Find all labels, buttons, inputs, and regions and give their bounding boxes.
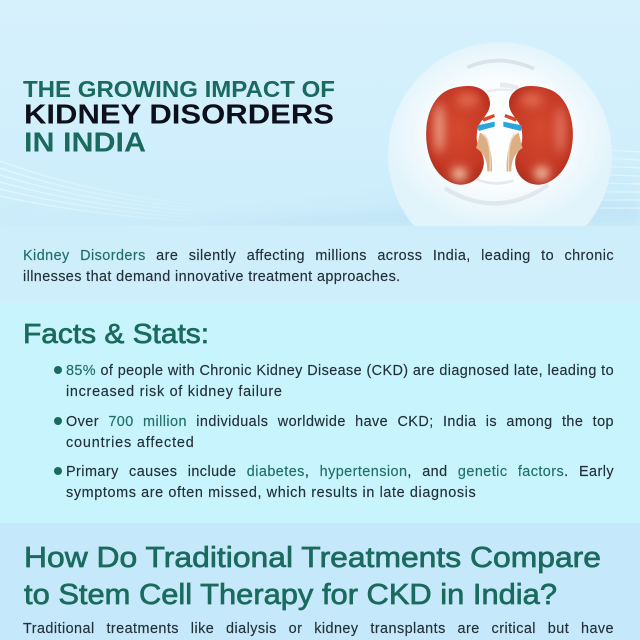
fact 3: symptoms are often missed, which results in late diagnosis: [66, 485, 476, 501]
heading: comparison: [24, 542, 601, 611]
fact 2: Over 700 million individuals worldwide have CKD; India is among the top: [66, 414, 614, 430]
heading: comparison: to Stem Cell Therapy for CKD in India?: [24, 579, 557, 611]
fact 2: [54, 414, 614, 451]
bullet list: [54, 363, 614, 501]
body text: Traditional treatments like dialysis or kidney transplants are critical but have: [23, 621, 614, 637]
icon: left kidney: [426, 86, 490, 185]
title: KIDNEY DISORDERS: [24, 98, 334, 130]
icon: right kidney: [509, 86, 573, 185]
heading: comparison: How Do Traditional Treatments Compare: [24, 542, 601, 574]
fact 3: Primary causes include diabetes, hypertension, and genetic factors. Early: [66, 464, 614, 480]
white circle behind kidneys: [388, 42, 612, 226]
icon: ureters and vessels: [476, 114, 523, 171]
title: IN INDIA: [24, 126, 146, 158]
panel: comparison: [0, 523, 640, 640]
heading: facts and stats: Facts & Stats:: [23, 318, 209, 349]
title: THE GROWING IMPACT OF: [23, 76, 335, 102]
wave band: [0, 171, 640, 226]
title: [23, 76, 335, 158]
panel: header background with kidney illustration: [0, 42, 640, 226]
intro text: Kidney Disorders are silently affecting millions across India, leading to chronic: [23, 248, 614, 264]
panel: intro: [0, 226, 640, 303]
panel: facts and stats: [0, 303, 640, 523]
fact 1: 85% of people with Chronic Kidney Disease (CKD) are diagnosed late, leading to: [66, 363, 614, 379]
wave lines: [0, 161, 230, 223]
intro text: [23, 248, 614, 285]
decorative rings: [445, 61, 548, 203]
fact 3: [54, 464, 614, 501]
intro text: illnesses that demand innovative treatment approaches.: [23, 269, 401, 285]
fact 2: countries affected: [66, 435, 195, 451]
fact 1: increased risk of kidney failure: [66, 384, 283, 400]
fact 1: [54, 363, 614, 400]
